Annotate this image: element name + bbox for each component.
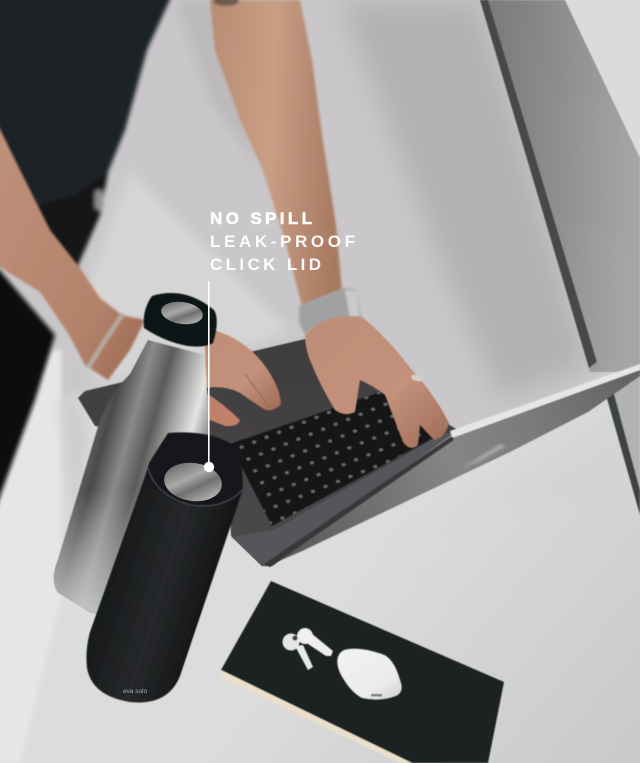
ring: [410, 374, 424, 382]
steel bottle black cap: [144, 293, 217, 347]
callout leader line: [208, 281, 210, 467]
person: shirt and trousers: [0, 0, 172, 510]
right wall panel: [480, 0, 640, 515]
laptop base: [78, 339, 458, 566]
steel bottle: [54, 293, 217, 614]
earbuds: [282, 628, 333, 670]
wristwatch: [299, 288, 362, 335]
person: right arm: [210, 0, 342, 306]
tumbler brand mark: eva solo: [123, 688, 148, 695]
callout text: leak-proof: LEAK-PROOF: [210, 232, 355, 251]
bracelet: [88, 314, 123, 368]
callout: product feature: [204, 209, 355, 472]
callout text: click lid: CLICK LID: [210, 255, 321, 274]
person: left arm and wrist: [0, 125, 145, 380]
notebook: [221, 581, 504, 763]
tumbler steel disk: [162, 459, 224, 505]
person: hand behind bottle: [205, 328, 281, 426]
lid logo: [462, 444, 506, 468]
person: right hand on keyboard: [305, 316, 449, 448]
tattoo: [213, 0, 239, 6]
callout text: no spill: NO SPILL: [210, 209, 312, 228]
keyboard: [230, 390, 440, 526]
tumbler lid: [147, 432, 243, 507]
laptop lid: [264, 364, 640, 567]
earbuds case: [337, 649, 402, 700]
black tumbler: [86, 432, 243, 702]
steel bottle lid disk: [160, 299, 204, 327]
belt buckle: [95, 190, 103, 210]
tumbler lid rim: [148, 468, 243, 506]
callout dot: [204, 462, 214, 472]
